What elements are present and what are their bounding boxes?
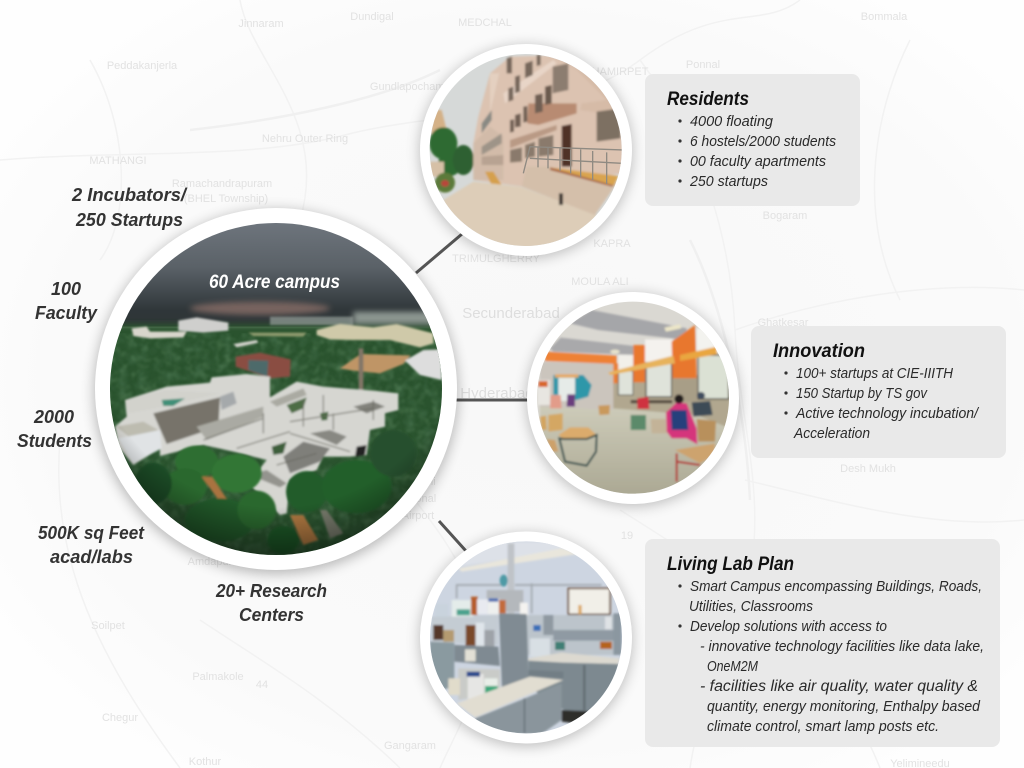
- living lab photo circle: [420, 532, 632, 746]
- map place labels: Deshmukhi: [840, 449, 896, 461]
- list: residents facts: [678, 114, 836, 190]
- map place labels: (BHEL Township): [184, 193, 268, 205]
- map place labels: Hyderabad: [460, 385, 534, 402]
- connector: campus to innovation: [456, 398, 528, 402]
- map place labels: Soilpet: [91, 620, 125, 632]
- stat: floor area: [38, 522, 145, 567]
- list: living lab details: OneM2M: [707, 659, 759, 675]
- list: residents facts: 00 faculty apartments: [690, 154, 826, 170]
- list: living lab details: - facilities like air quality, water quality &: [700, 678, 978, 695]
- map place labels: TRIMULGHERRY: [452, 253, 541, 265]
- stat: faculty: 100: [51, 278, 82, 299]
- map place labels: Ponnal: [686, 59, 720, 71]
- stat: research centers: Centers: [239, 604, 304, 625]
- map place labels: 44: [256, 679, 268, 691]
- map place labels: Peddakanjerla: [107, 60, 178, 72]
- stat: faculty: [35, 278, 99, 323]
- map place labels: Bommala: [861, 11, 908, 23]
- map place labels: 19: [621, 530, 633, 542]
- innovation photo circle: [527, 292, 739, 506]
- map place labels: KAPRA: [593, 238, 631, 250]
- connector: campus to living lab: [439, 521, 466, 551]
- map place labels: Gandhi: [400, 476, 436, 488]
- caption: 60 Acre campus: 60 Acre campus: [209, 271, 340, 293]
- map place labels: Dundigal: [350, 11, 394, 23]
- map place labels: MEDCHAL: [458, 17, 512, 29]
- map place labels: National: [396, 493, 436, 505]
- main campus photo circle: [95, 208, 457, 573]
- list: living lab details: Smart Campus encompassing Buildings, Roads,: [690, 579, 982, 595]
- stat: floor area: acad/labs: [50, 546, 133, 567]
- list: residents facts: 4000 floating: [690, 114, 773, 130]
- map place labels: Ramachandrapuram: [172, 178, 272, 190]
- list: residents facts: 250 startups: [689, 174, 768, 190]
- map place labels: Jinnaram: [238, 18, 284, 30]
- list: innovation facts: 100+ startups at CIE-IIITH: [796, 366, 953, 382]
- map place labels: MATHANGI: [89, 155, 147, 167]
- heading: living lab plan: Living Lab Plan: [667, 554, 794, 575]
- list: living lab details: Utilities, Classrooms: [689, 599, 813, 615]
- stat: students: [17, 406, 92, 451]
- map place labels: Bogaram: [763, 210, 807, 222]
- panel: living lab plan: [645, 539, 1000, 747]
- residents photo circle: [420, 44, 632, 258]
- map place labels: Airport: [402, 510, 434, 522]
- list: innovation facts: 150 Startup by TS gov: [796, 386, 928, 402]
- stat: incubators: [71, 184, 188, 230]
- map place labels: Palmakole: [192, 671, 244, 683]
- panel: residents: [645, 74, 860, 206]
- list: innovation facts: Acceleration: [793, 426, 870, 442]
- connector: campus to residents: [416, 234, 462, 273]
- map place labels: Desh Mukh: [840, 463, 896, 475]
- map place labels: HAMIRPET: [592, 66, 649, 78]
- stat: research centers: [215, 580, 327, 625]
- list: living lab details: quantity, energy monitoring, Enthalpy based: [707, 699, 981, 715]
- map place labels: Ghatkesar: [758, 317, 809, 329]
- stat: incubators: 2 Incubators/: [71, 184, 188, 205]
- list: living lab details: - innovative technology facilities like data lake,: [700, 639, 984, 655]
- panel: innovation: [751, 326, 1006, 458]
- map place labels: Gundlapochampalli: [370, 81, 464, 93]
- stat: students: 2000: [33, 406, 75, 427]
- map place labels: MOULA ALI: [571, 276, 629, 288]
- stat: students: Students: [17, 430, 92, 451]
- map place labels: Amdapur: [188, 556, 233, 568]
- list: innovation facts: Active technology incubation/: [795, 406, 980, 422]
- heading: innovation: Innovation: [773, 341, 865, 362]
- list: residents facts: 6 hostels/2000 students: [690, 134, 836, 150]
- stat: incubators: 250 Startups: [75, 209, 183, 230]
- list: living lab details: climate control, smart lamp posts etc.: [707, 719, 939, 735]
- map place labels: Kothur: [189, 756, 222, 768]
- campus stats around main circle: [17, 184, 327, 625]
- heading: residents: Residents: [667, 89, 749, 110]
- list: living lab details: [678, 579, 984, 735]
- list: innovation facts: [784, 366, 980, 442]
- map place labels: Secunderabad: [462, 305, 560, 322]
- map place labels: Chegur: [102, 712, 138, 724]
- stat: research centers: 20+ Research: [215, 580, 327, 601]
- stat: faculty: Faculty: [35, 302, 99, 323]
- stat: floor area: 500K sq Feet: [38, 522, 145, 543]
- map place labels: Gangaram: [384, 740, 436, 752]
- map place labels: Nehru Outer Ring: [262, 133, 348, 145]
- list: living lab details: Develop solutions with access to: [690, 619, 887, 635]
